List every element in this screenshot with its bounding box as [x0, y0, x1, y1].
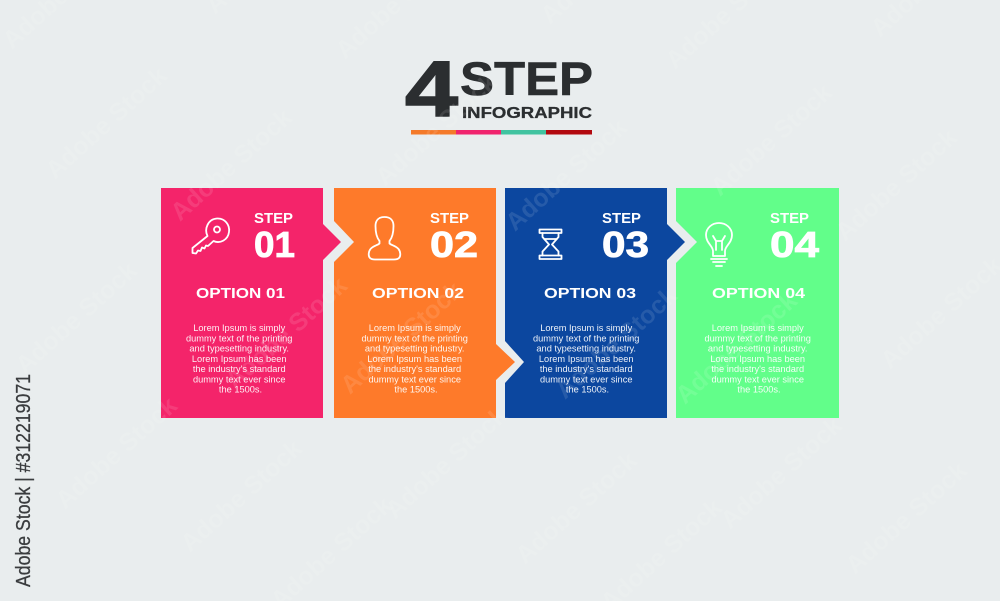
colour bar under title	[411, 130, 592, 134]
text: Adobe Stock	[550, 281, 683, 404]
text: Adobe Stock	[380, 401, 513, 524]
body text: Lorem Ipsum is simply	[540, 323, 633, 333]
body text: Lorem Ipsum has been	[539, 354, 634, 364]
text: Adobe Stock	[370, 68, 503, 191]
step label: STEP	[770, 211, 809, 227]
icon: hourglass	[540, 230, 562, 259]
option heading: OPTION 02	[372, 285, 464, 302]
stock image id caption: Adobe Stock | #312219071	[13, 374, 35, 587]
body text: Lorem Ipsum is simply	[712, 323, 804, 333]
body text: dummy text ever since	[711, 374, 804, 384]
icon: person	[369, 217, 400, 260]
body text: Lorem Ipsum has been	[192, 354, 287, 364]
body text: dummy text ever since	[540, 374, 632, 384]
body text: Lorem Ipsum is simply	[193, 323, 286, 333]
body text: dummy text of the printing	[533, 333, 639, 343]
pink panel shape with arrow	[161, 188, 341, 418]
text: Adobe Stock	[10, 256, 143, 379]
body text: the 1500s.	[219, 385, 262, 395]
option heading: OPTION 01	[196, 285, 285, 302]
step number: 04	[770, 224, 819, 265]
body text: and typesetting industry.	[189, 344, 289, 354]
panel: step 4	[676, 188, 839, 418]
step label: STEP	[602, 211, 641, 227]
body text: Lorem Ipsum is simply	[369, 323, 461, 333]
body text: the 1500s.	[394, 385, 438, 395]
body text: dummy text ever since	[193, 374, 285, 384]
text: Adobe Stock	[510, 446, 643, 569]
icon: light bulb	[706, 223, 732, 266]
title numeral 4: 4	[405, 44, 458, 133]
text: Adobe Stock	[50, 391, 183, 514]
body text: the 1500s.	[737, 385, 781, 395]
body text: Lorem Ipsum has been	[367, 354, 462, 364]
option heading: OPTION 04	[712, 285, 806, 302]
body text: dummy text of the printing	[361, 333, 468, 343]
green panel shape with notch	[676, 188, 839, 418]
option heading: OPTION 03	[544, 285, 636, 302]
body text: dummy text of the printing	[186, 333, 292, 343]
text: Adobe Stock	[830, 123, 963, 246]
step number: 03	[602, 224, 649, 265]
body text: the 1500s.	[566, 385, 609, 395]
text: Adobe Stock	[165, 103, 298, 226]
icon: key	[192, 218, 229, 254]
text: Adobe Stock	[220, 271, 353, 394]
title	[405, 44, 593, 133]
body text: and typesetting industry.	[536, 344, 636, 354]
step number: 02	[430, 224, 478, 265]
text: Adobe Stock	[500, 113, 633, 236]
panel: step 2	[334, 188, 515, 418]
body text: the industry's standard	[193, 364, 286, 374]
step label: STEP	[254, 211, 293, 227]
title word STEP: STEP	[460, 52, 593, 105]
text: Adobe Stock	[670, 286, 803, 409]
body text: Lorem Ipsum has been	[710, 354, 805, 364]
body text: and typesetting industry.	[708, 344, 808, 354]
text: Adobe Stock	[715, 411, 848, 534]
step number: 01	[254, 224, 295, 265]
text: Adobe Stock	[335, 276, 468, 399]
body text: dummy text of the printing	[704, 333, 811, 343]
step label: STEP	[430, 211, 469, 227]
text: Adobe Stock	[40, 61, 173, 184]
orange panel shape with notch and arrow	[334, 188, 515, 418]
body text: the industry's standard	[368, 364, 461, 374]
body text: dummy text ever since	[368, 374, 461, 384]
panel: step 1	[161, 188, 341, 418]
text: Adobe Stock	[840, 456, 973, 579]
body text: and typesetting industry.	[365, 344, 465, 354]
text: Adobe Stock	[705, 78, 838, 201]
body text: the industry's standard	[540, 364, 633, 374]
text: Adobe Stock	[175, 434, 308, 557]
body text: the industry's standard	[711, 364, 804, 374]
panel: step 3	[505, 188, 685, 418]
title word INFOGRAPHIC: INFOGRAPHIC	[462, 105, 593, 122]
blue panel shape with notch and arrow	[505, 188, 685, 418]
